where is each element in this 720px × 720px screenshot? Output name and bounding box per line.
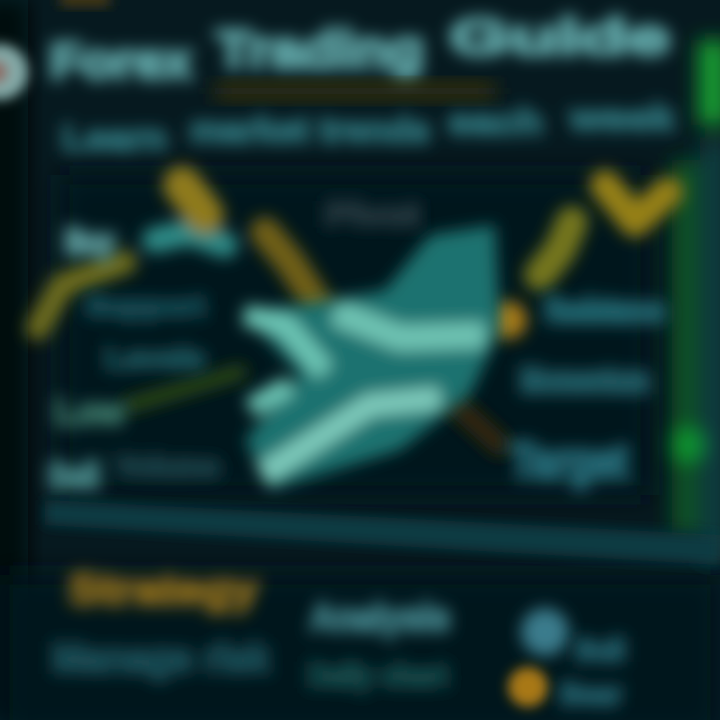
left labels: Sell [48, 455, 100, 496]
panel: dark left edge [0, 0, 28, 720]
left labels: Volume [115, 450, 220, 483]
title underline accent [215, 84, 495, 98]
right vertical green bar [670, 40, 720, 560]
icon: top left badge [0, 44, 28, 100]
right labels: Momentum [520, 359, 650, 400]
subtitle [62, 97, 676, 158]
left labels [48, 221, 220, 496]
left labels: Buy [65, 221, 115, 262]
title: Trading [216, 20, 424, 80]
chart baseline band [45, 500, 720, 565]
line chart: right rising gold trend [489, 185, 668, 339]
footer text block center: Daily chart [308, 657, 448, 693]
panel: chart glow [60, 175, 650, 495]
legend labels [560, 634, 625, 711]
left labels: Support [85, 290, 205, 323]
right labels: Target [510, 433, 628, 489]
title: Forex [50, 33, 192, 89]
line chart: lower dark trend [130, 372, 500, 445]
legend [508, 608, 625, 711]
subtitle: Learn [62, 117, 167, 158]
footer heading: Strategy [68, 565, 259, 614]
center chart label: Pivot [325, 196, 420, 234]
legend labels: Bull [575, 634, 625, 667]
title: Guide [450, 9, 670, 65]
footer text block left: Manage risk [52, 634, 271, 681]
subtitle: market trends [190, 109, 430, 150]
top gold fragment [60, 0, 110, 6]
line chart: left rising and falling gold trend [38, 185, 318, 328]
legend marker: teal [521, 608, 569, 656]
left labels: Low [55, 391, 126, 432]
footer text block center [308, 597, 450, 693]
footer text block center: Analysis [310, 597, 450, 639]
title [50, 9, 670, 89]
subtitle: week [569, 97, 676, 138]
right labels [510, 289, 665, 489]
central arrow graphic [240, 225, 500, 490]
legend labels: Bear [560, 678, 622, 711]
panel: lower dark area [0, 575, 720, 720]
legend marker: gold [508, 667, 548, 707]
left labels: Levels [105, 342, 205, 375]
subtitle: each [448, 101, 543, 142]
